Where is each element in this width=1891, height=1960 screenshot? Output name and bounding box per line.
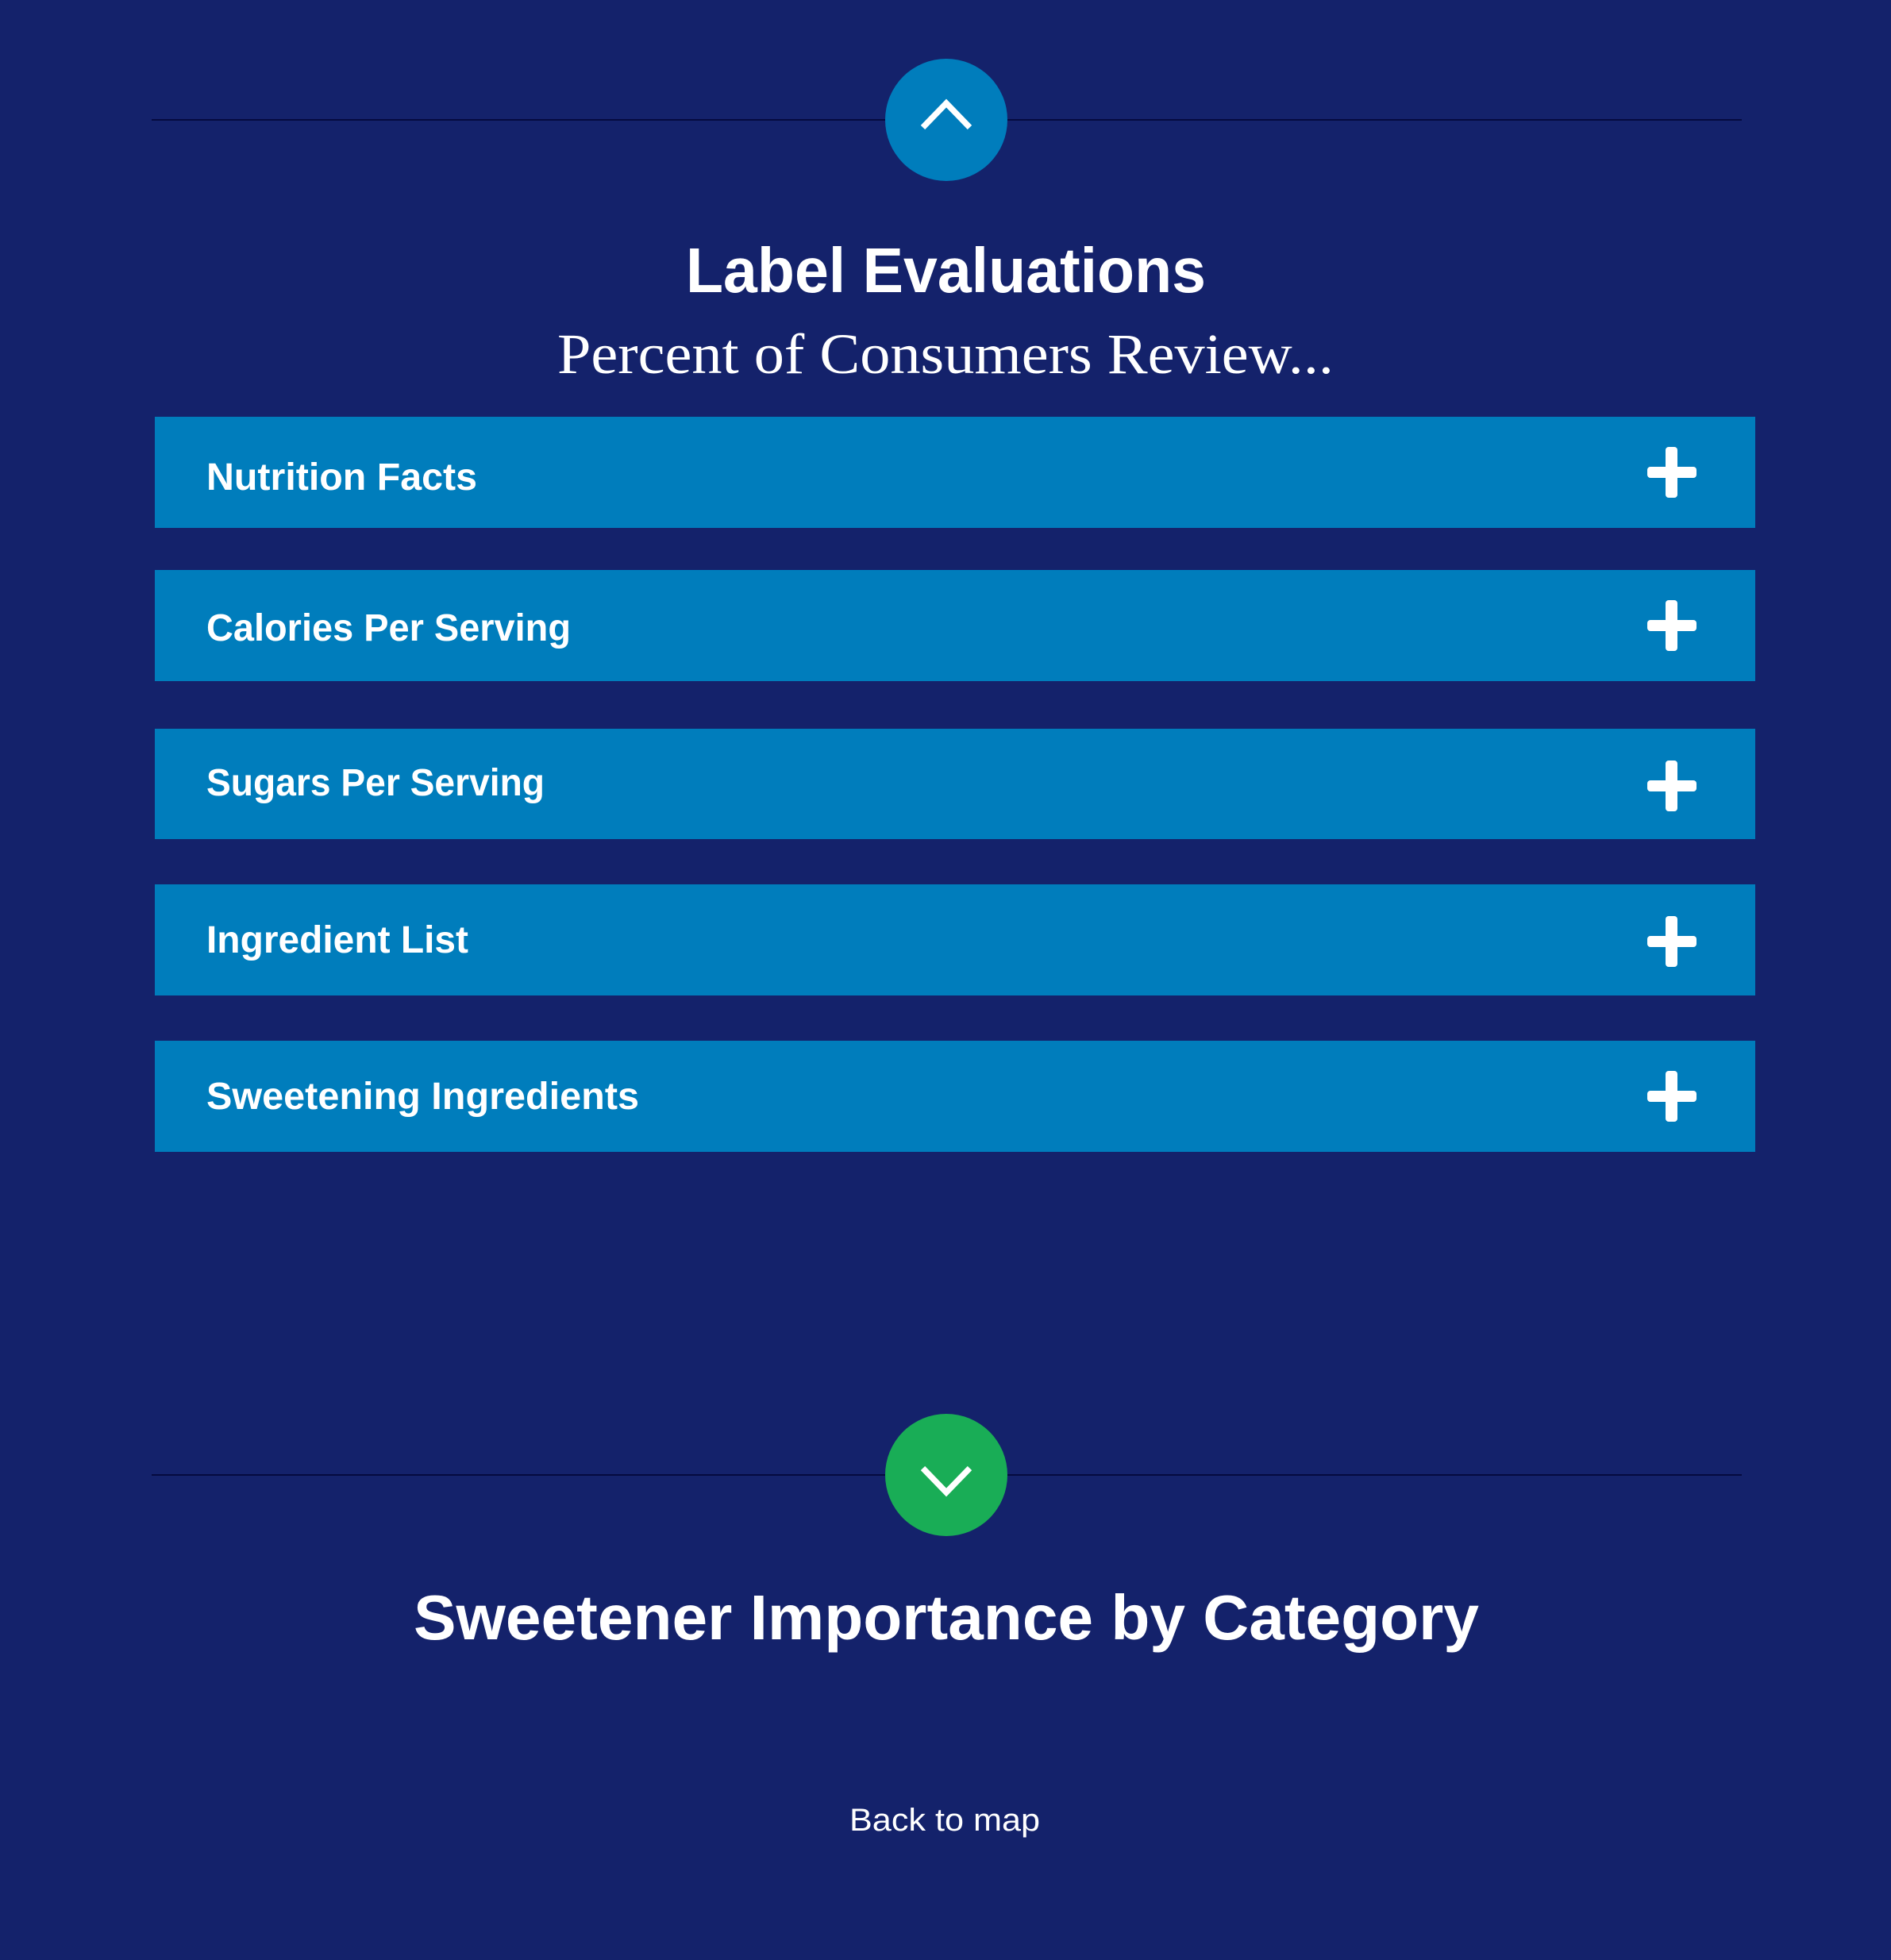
- icon: blue circle with up chevron: [885, 59, 1007, 181]
- panel: Ingredient List row: [155, 884, 1755, 995]
- panel: Nutrition Facts row: [155, 417, 1755, 528]
- icon: green circle with down chevron: [885, 1414, 1007, 1536]
- panel: Sweetening Ingredients row: Sweetening Ingredients: [206, 1076, 639, 1118]
- panel: Nutrition Facts row: Nutrition Facts: [206, 456, 477, 499]
- title: Label Evaluations: Label Evaluations: [686, 235, 1206, 306]
- panel: Sugars Per Serving row: Sugars Per Serving: [206, 762, 545, 804]
- panel: Sweetening Ingredients row: [155, 1041, 1755, 1152]
- subtitle: Percent of Consumers Review: Percent of Consumers Review...: [557, 322, 1334, 386]
- link: Back to map: Back to map: [849, 1803, 1040, 1838]
- panel: Ingredient List row: Ingredient List: [206, 919, 468, 961]
- heading: Sweetener Importance by Category: Sweetener Importance by Category: [414, 1582, 1480, 1653]
- panel: Sugars Per Serving row: [155, 729, 1755, 839]
- panel: Calories Per Serving row: [155, 570, 1755, 681]
- panel: Calories Per Serving row: Calories Per Serving: [206, 607, 571, 649]
